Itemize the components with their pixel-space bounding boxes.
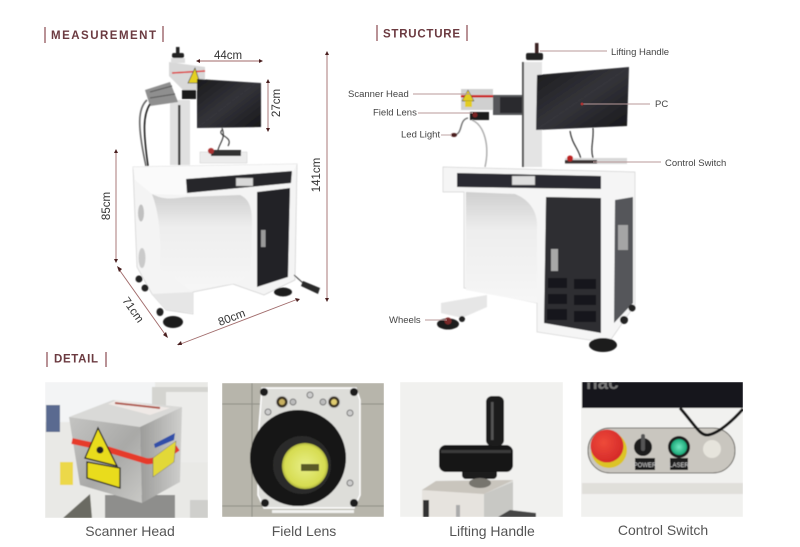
top label — [108, 400, 170, 415]
caption: field lens: Field Lens — [272, 523, 336, 539]
dimension: 85cm: 85cm — [101, 192, 113, 220]
cabinet body — [443, 167, 635, 343]
knee shading — [466, 192, 537, 303]
handle — [176, 47, 180, 57]
steel plate — [588, 428, 735, 473]
callout: field lens — [373, 108, 473, 118]
callout: control switch — [593, 158, 726, 169]
caption: control switch: Control Switch — [618, 522, 708, 538]
heading: detail: DETAIL — [54, 354, 98, 366]
panel: lifting handle photo — [400, 382, 563, 517]
dimension: 44cm — [196, 50, 263, 63]
dimension: 71cm: 71cm — [119, 295, 145, 325]
monitor cable — [680, 408, 743, 435]
callout: lifting handle — [540, 47, 669, 58]
panel: control switch photo — [581, 373, 743, 517]
side label — [153, 441, 176, 477]
heading: structure: STRUCTURE — [383, 28, 460, 40]
heading: detail — [47, 352, 106, 367]
monitor — [197, 79, 261, 128]
callout: field lens: Field Lens — [373, 108, 417, 118]
table top — [133, 164, 297, 195]
field lens — [470, 112, 489, 120]
callout: scanner head: Scanner Head — [348, 89, 409, 100]
heading: measurement: MEASUREMENT — [51, 30, 156, 42]
machine: structure view — [437, 43, 636, 352]
caption: lifting handle: Lifting Handle — [449, 523, 535, 539]
pillar — [170, 100, 190, 165]
foot block — [441, 295, 487, 318]
grip — [486, 396, 504, 446]
control panel — [200, 152, 247, 163]
lens — [250, 410, 346, 506]
side vents — [138, 204, 144, 222]
dimension: 27cm: 27cm — [271, 89, 283, 117]
callout: lifting handle: Lifting Handle — [611, 47, 669, 58]
hub — [461, 471, 498, 480]
mounting plate — [258, 388, 360, 508]
callout: pc: PC — [655, 99, 668, 110]
dimension: 44cm: 44cm — [214, 50, 242, 62]
callout: pc — [580, 99, 668, 110]
arm and cable — [145, 82, 178, 106]
feet — [437, 318, 459, 330]
monitor — [536, 67, 629, 130]
box faces — [69, 400, 182, 427]
callout: wheels — [389, 315, 447, 326]
control panel — [565, 158, 627, 164]
dimension: 141cm — [311, 51, 329, 302]
pillar — [522, 62, 542, 167]
dimension: 85cm — [101, 149, 118, 263]
heading: measurement — [45, 26, 163, 43]
cabinet body — [133, 164, 297, 314]
door — [257, 188, 290, 287]
dimension: 27cm — [266, 79, 283, 132]
power knob — [634, 438, 652, 456]
handwheel — [439, 445, 513, 472]
warning triangle — [85, 428, 117, 466]
pedal — [301, 281, 320, 294]
laser button — [668, 436, 690, 458]
panel: control switch photo: nac — [586, 373, 619, 394]
feet — [163, 316, 183, 328]
warning plate — [87, 462, 120, 488]
callout: control switch: Control Switch — [665, 158, 726, 169]
dimension: 80cm — [177, 298, 300, 345]
monitor edge — [582, 382, 743, 408]
handle — [535, 43, 538, 53]
foot block — [152, 292, 193, 313]
screws — [260, 388, 268, 396]
front strip — [186, 171, 292, 193]
side panel — [614, 197, 633, 323]
red band — [72, 441, 178, 461]
panel: control switch photo: LASER — [669, 463, 689, 469]
emergency stop — [591, 432, 627, 468]
scanner head — [461, 89, 493, 110]
arm — [493, 95, 522, 115]
front strip — [457, 173, 601, 189]
knee opening — [152, 194, 252, 290]
strip — [582, 483, 743, 494]
door — [544, 197, 601, 333]
panel: scanner head photo — [45, 382, 208, 518]
connectors — [276, 396, 288, 408]
panel: field lens photo — [222, 383, 384, 517]
dimension: 141cm: 141cm — [311, 158, 323, 192]
machine: measurement view — [133, 47, 320, 328]
blank button — [703, 440, 721, 458]
callout: wheels: Wheels — [389, 315, 421, 326]
scanner head — [169, 62, 205, 90]
callout: scanner head — [348, 89, 470, 100]
callout: led light: Led Light — [401, 130, 440, 140]
dimension: 80cm: 80cm — [217, 308, 247, 329]
dimension: 71cm — [117, 266, 168, 338]
cable and LED — [472, 120, 487, 167]
heading: structure — [377, 25, 467, 41]
caption: scanner head: Scanner Head — [85, 523, 175, 539]
block — [493, 480, 513, 490]
panel: control switch photo: POWER — [634, 463, 657, 469]
